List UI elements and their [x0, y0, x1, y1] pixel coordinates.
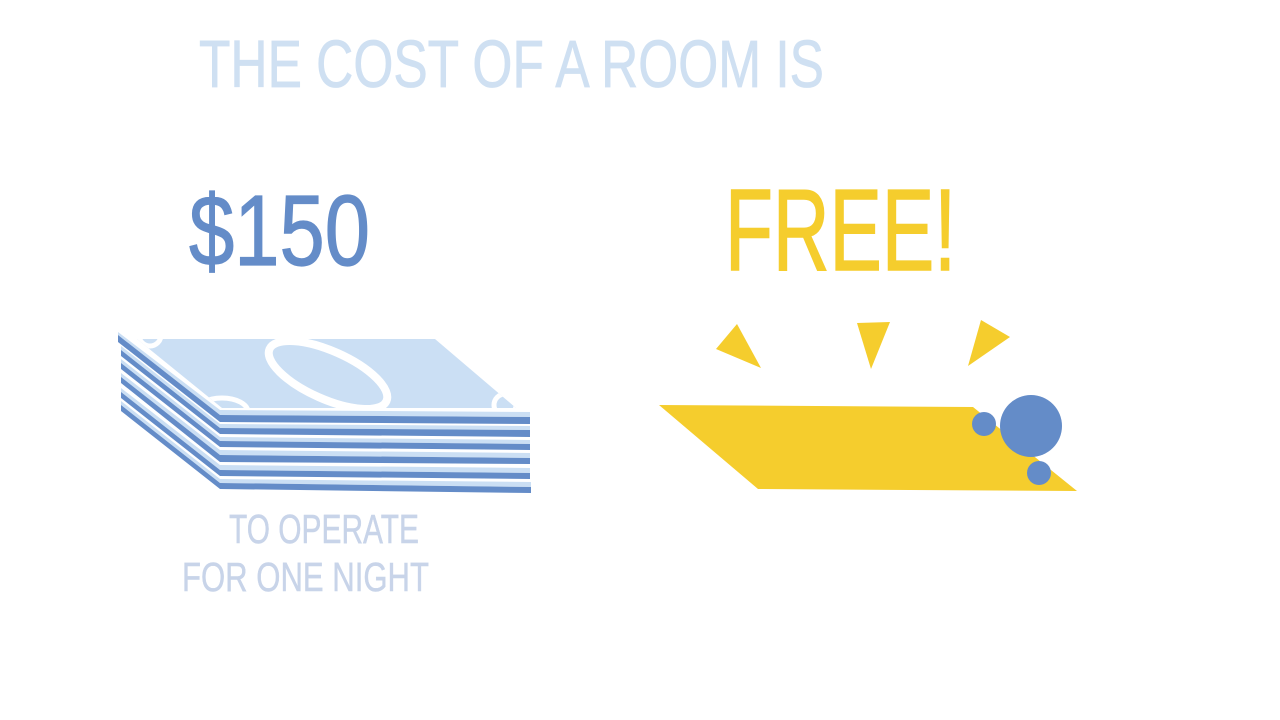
coins — [972, 395, 1062, 485]
price: $150: $150 — [189, 175, 370, 287]
caption: to operate for one night — [182, 506, 429, 600]
caption: to operate for one night: TO OPERATE — [229, 506, 419, 552]
title: THE COST OF A ROOM IS — [199, 27, 824, 102]
icon: stack of bills — [118, 324, 531, 493]
icon: burst triangles — [716, 320, 1010, 369]
icon: yellow bill — [659, 395, 1077, 491]
bill edges — [118, 332, 531, 493]
bill top face — [137, 339, 516, 408]
caption: to operate for one night: FOR ONE NIGHT — [182, 554, 429, 600]
heading: FREE!: FREE! — [725, 165, 956, 295]
